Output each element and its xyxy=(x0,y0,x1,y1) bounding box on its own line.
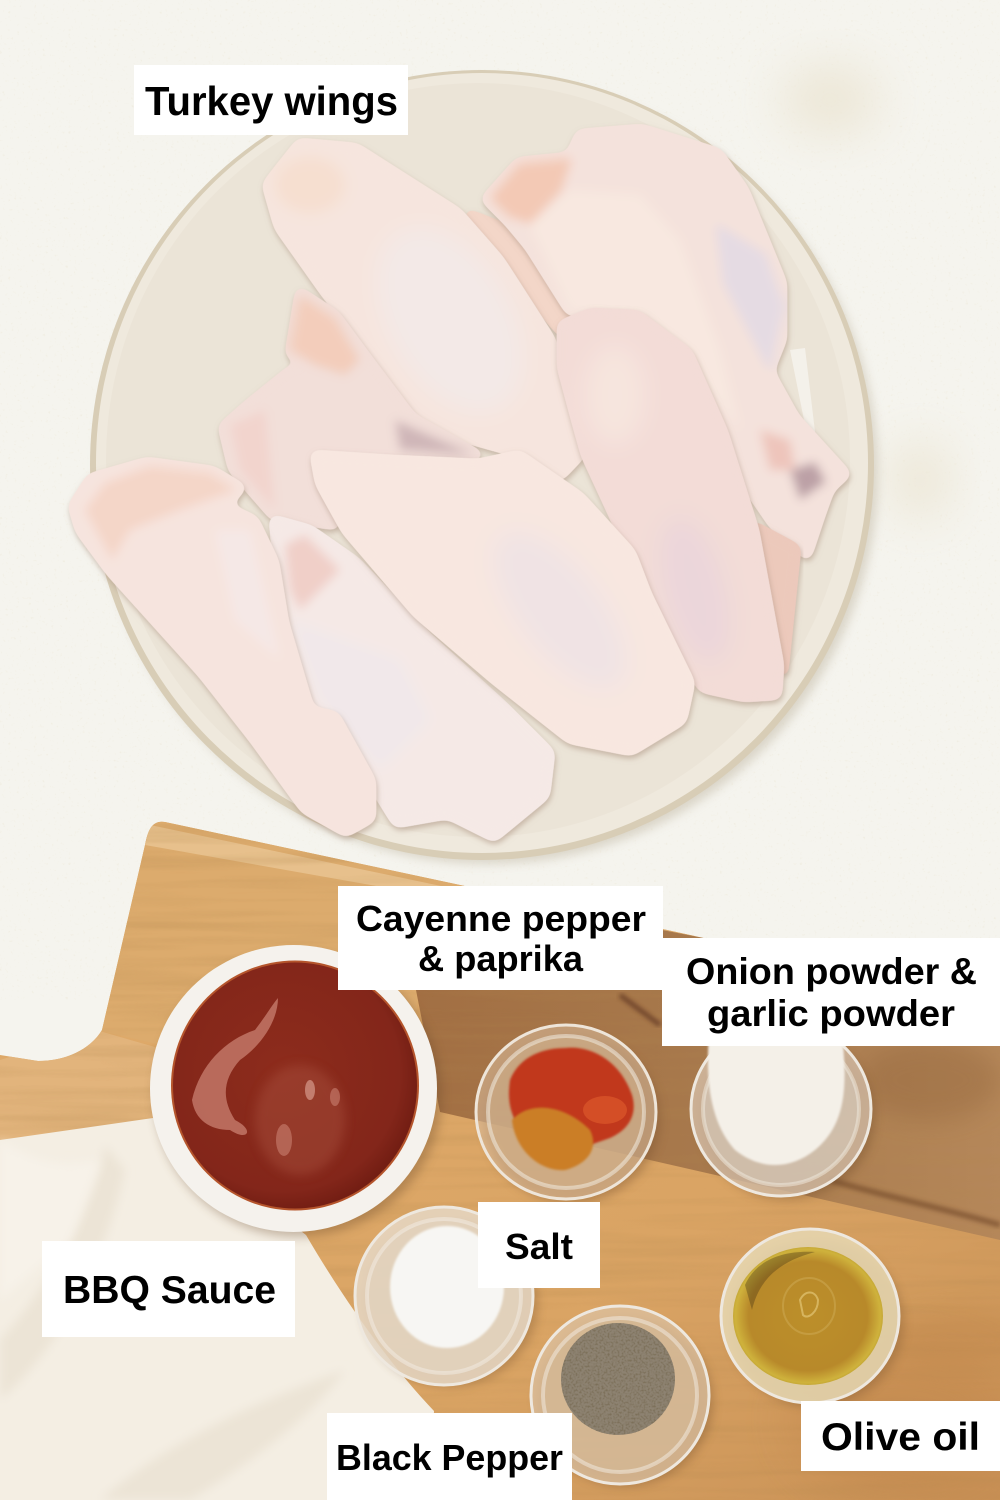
label: Olive oil: Olive oil xyxy=(821,1416,980,1459)
label: Onion powder and garlic powder: Onion powder & xyxy=(686,951,977,992)
board: dark middle plank xyxy=(415,930,1000,1240)
wing: top right xyxy=(486,129,846,555)
cutting board xyxy=(0,800,1000,1500)
label: Black Pepper: Black Pepper xyxy=(336,1437,563,1478)
board: handle light wood xyxy=(101,822,694,1032)
wing: lower fan xyxy=(274,520,550,837)
label: Turkey wings: Turkey wings xyxy=(145,78,398,124)
plate xyxy=(90,70,878,864)
towel xyxy=(0,1118,434,1500)
label: Black Pepper xyxy=(327,1413,572,1500)
wing: right front xyxy=(562,313,779,697)
wing: small lower right xyxy=(754,525,797,674)
wing: small back centre xyxy=(468,213,570,334)
label: Olive oil xyxy=(801,1401,1000,1471)
bowl: salt xyxy=(355,1207,538,1387)
label: Cayenne pepper and paprika: & paprika xyxy=(418,938,584,979)
label: Cayenne pepper and paprika xyxy=(338,886,663,990)
bowl: cayenne and paprika xyxy=(476,1025,660,1203)
label: BBQ Sauce: BBQ Sauce xyxy=(63,1269,276,1312)
label: Cayenne pepper and paprika: Cayenne pepper xyxy=(356,898,646,939)
wing: upper centre xyxy=(267,143,580,476)
wing: far left xyxy=(73,462,371,832)
bowl: onion and garlic powder xyxy=(691,1022,875,1200)
bowl: BBQ sauce xyxy=(150,945,442,1237)
label: Onion powder and garlic powder xyxy=(662,938,1000,1046)
wing: centre front xyxy=(315,455,690,751)
bowl: black pepper xyxy=(531,1306,713,1486)
wing: left middle xyxy=(223,292,478,525)
label: Salt xyxy=(478,1202,600,1288)
label: Turkey wings xyxy=(134,65,408,135)
label: Salt: Salt xyxy=(505,1226,573,1267)
label: BBQ Sauce xyxy=(42,1241,295,1337)
bowl: olive oil xyxy=(721,1229,904,1407)
turkey wings xyxy=(73,129,846,837)
label: Onion powder and garlic powder: garlic powder xyxy=(707,993,955,1034)
sauce highlights xyxy=(192,998,345,1175)
board: left light plank xyxy=(0,1032,156,1140)
